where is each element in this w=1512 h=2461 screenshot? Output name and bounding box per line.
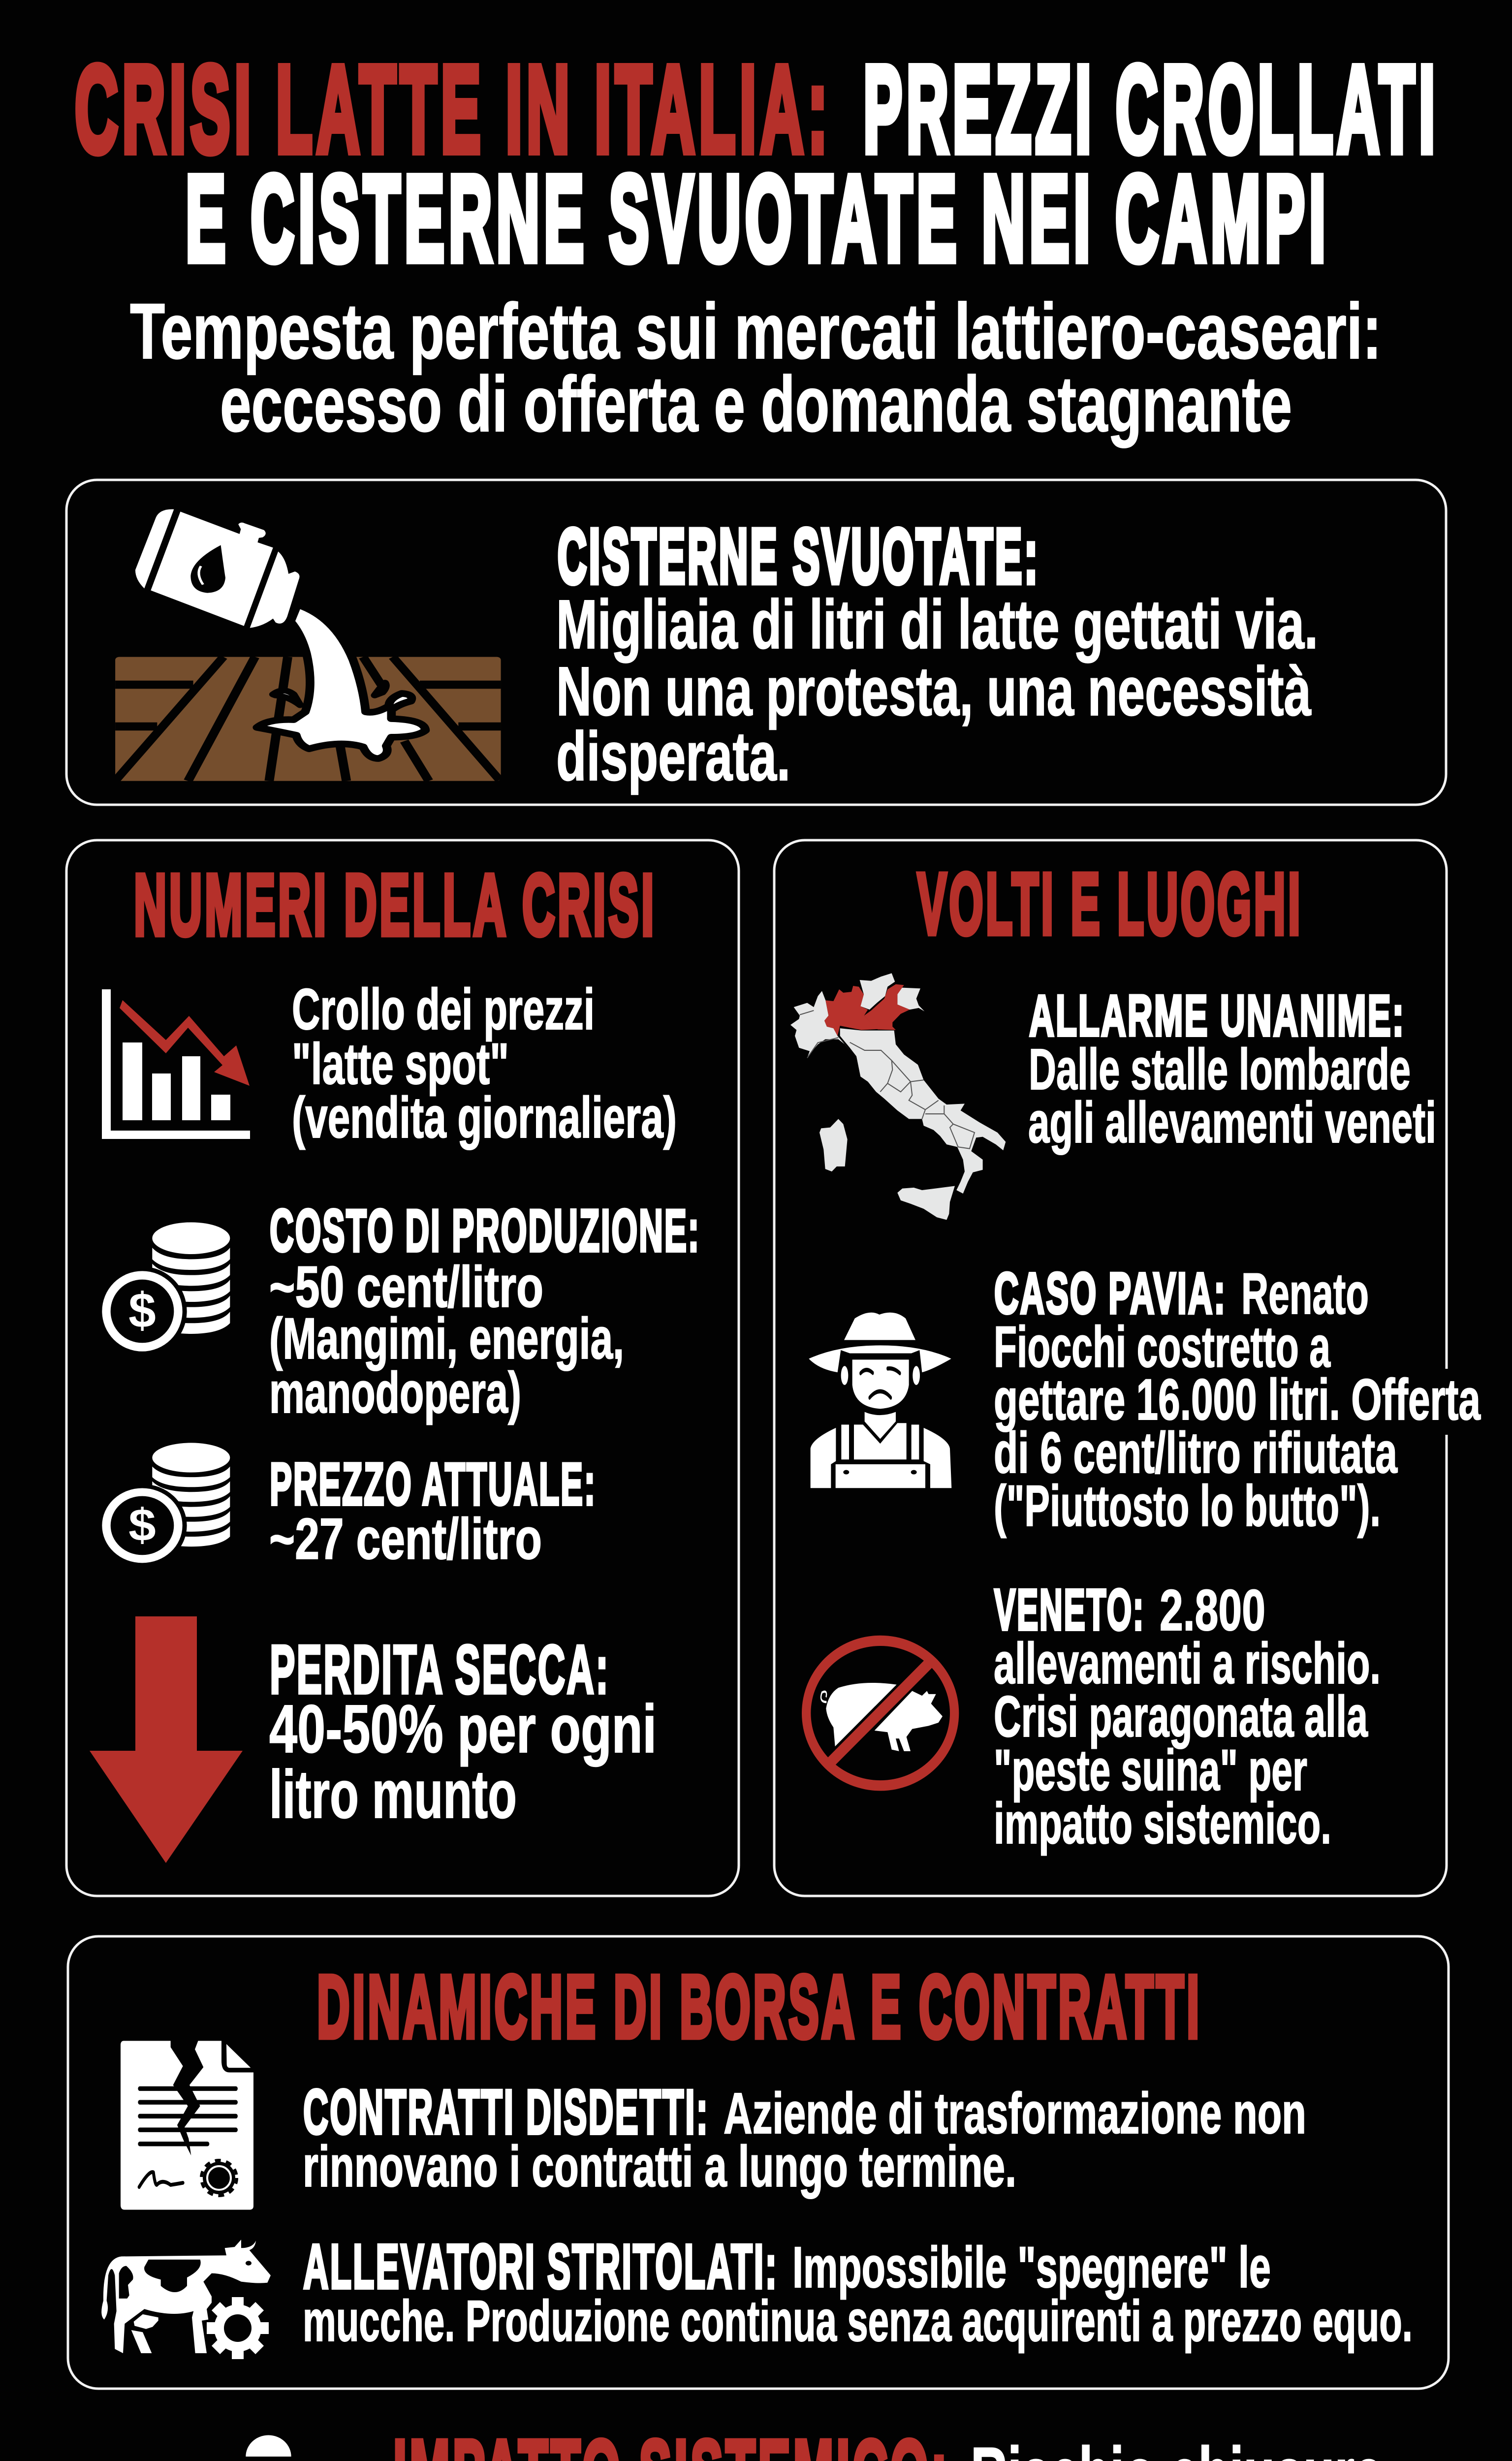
- heading: numeri della crisi: NUMERI DELLA CRISI: [134, 857, 657, 953]
- icon: torn contract: [121, 2040, 253, 2210]
- text: allevatori stritolati: [303, 2232, 1413, 2354]
- text: crollo dei prezzi: Crollo dei prezzi: [292, 977, 595, 1042]
- panel: dinamiche di borsa e contratti: [68, 1936, 1449, 2389]
- text: veneto: impatto sistemico.: [994, 1791, 1331, 1856]
- text: costo di produzione: COSTO DI PRODUZIONE:: [270, 1197, 700, 1264]
- icon: map of italy: [790, 973, 1006, 1220]
- icon: sad farmer: [809, 1313, 951, 1488]
- text: perdita secca: 40-50% per ogni: [269, 1691, 657, 1767]
- text: allevatori stritolati: Impossibile "spegnere" le: [792, 2235, 1271, 2300]
- arrow: red down arrow: [90, 1616, 243, 1863]
- icon: milk can pouring on wooden floor: [115, 509, 501, 781]
- text: caso pavia: CASO PAVIA:: [994, 1261, 1227, 1326]
- text: caso pavia: Renato: [1241, 1262, 1369, 1326]
- text: prezzo attuale: ~27 cent/litro: [269, 1507, 542, 1572]
- icon: coins: [97, 1222, 230, 1356]
- text: veneto: "peste suina" per: [994, 1738, 1307, 1803]
- panel: volti e luoghi: [774, 840, 1481, 1896]
- icon: prohibited pig: [802, 1636, 959, 1791]
- text: caso pavia: [994, 1261, 1481, 1539]
- icon: coins: $: [128, 1500, 156, 1550]
- text: perdita secca: litro munto: [269, 1757, 517, 1832]
- text: caso pavia: Fiocchi costretto a: [994, 1315, 1331, 1380]
- text: veneto: 2.800: [1160, 1578, 1265, 1643]
- text: contratti disdetti: CONTRATTI DISDETTI:: [303, 2077, 709, 2147]
- text: cisterne svuotate: disperata.: [556, 717, 790, 795]
- text: prezzo attuale: [269, 1451, 597, 1572]
- icon: falling price chart: [102, 989, 250, 1139]
- text: allarme unanime: [1028, 983, 1436, 1155]
- text: cisterne svuotate: [556, 513, 1318, 795]
- subtitle: [130, 287, 1382, 448]
- text: crollo dei prezzi: "latte spot": [292, 1032, 509, 1097]
- text: costo di produzione: (Mangimi, energia,: [269, 1306, 624, 1371]
- text: crollo dei prezzi: [292, 977, 677, 1150]
- panel: numeri della crisi: [66, 840, 739, 1896]
- icon: farm with warning sign: [111, 2435, 337, 2461]
- text: costo di produzione: [269, 1197, 700, 1425]
- text: veneto: VENETO:: [994, 1578, 1145, 1642]
- title: [75, 40, 1439, 286]
- text: veneto: [994, 1578, 1381, 1856]
- text: perdita secca: [269, 1631, 657, 1832]
- text: contratti disdetti: rinnovano i contratti a lungo termine.: [303, 2134, 1016, 2199]
- text: perdita secca: PERDITA SECCA:: [270, 1631, 610, 1708]
- icon: coins: $: [128, 1283, 156, 1338]
- text: costo di produzione: manodopera): [269, 1360, 521, 1425]
- icon: coins: [97, 1443, 230, 1567]
- text: crollo dei prezzi: (vendita giornaliera): [292, 1085, 677, 1150]
- text: contratti disdetti: [303, 2077, 1306, 2199]
- text: cisterne svuotate: CISTERNE SVUOTATE:: [558, 513, 1040, 599]
- panel: cisterne svuotate: [66, 480, 1446, 805]
- text: costo di produzione: ~50 cent/litro: [269, 1255, 543, 1320]
- text: allevatori stritolati: ALLEVATORI STRITOLATI:: [303, 2232, 778, 2302]
- icon: cow and gear: [101, 2240, 271, 2359]
- text: prezzo attuale: PREZZO ATTUALE:: [270, 1451, 597, 1517]
